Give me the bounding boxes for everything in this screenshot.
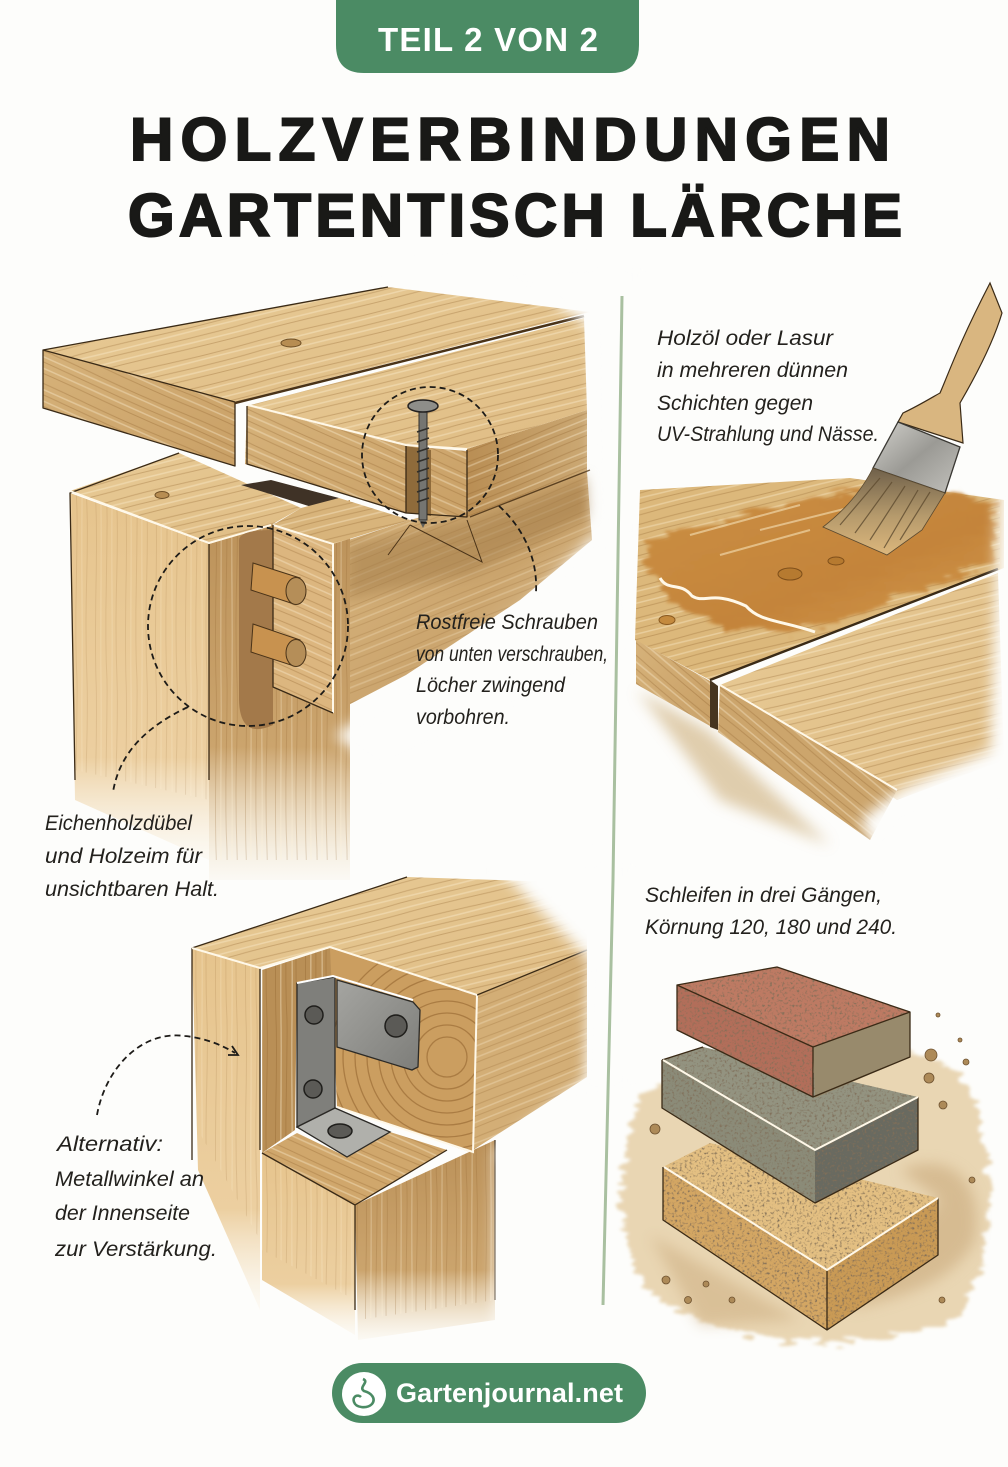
note: dowels: unsichtbaren Halt. (45, 878, 219, 901)
dowel upper (251, 563, 306, 604)
note: screws: Rostfreie Schrauben (416, 611, 598, 634)
note: oil: Holzöl oder Lasur (657, 327, 834, 350)
panel: dowel joint and screws illustration (43, 265, 640, 880)
beam: side of frame (333, 472, 592, 713)
board: right table board with screw slot (245, 318, 587, 517)
note: bracket: der Innenseite (55, 1202, 190, 1225)
note: screws: Löcher zwingend (416, 674, 566, 697)
note: sanding: Schleifen in drei Gängen, (645, 884, 882, 907)
divider between columns (603, 296, 622, 1305)
callout circle: screw (362, 387, 498, 523)
sawdust particles (650, 1013, 975, 1304)
title: HOLZVERBINDUNGEN (130, 106, 890, 173)
leader: dowel note (113, 707, 188, 792)
note: bracket: zur Verstärkung. (54, 1238, 217, 1261)
sawdust patch (623, 1045, 988, 1341)
recess back wall (262, 948, 337, 1153)
leg left face (192, 948, 260, 1310)
badge: part indicator (336, 0, 639, 73)
beam top face (192, 877, 587, 995)
badge: part indicator: TEIL 2 VON 2 (378, 21, 598, 58)
panel: sanding blocks illustration (623, 967, 988, 1341)
leader: screw note (499, 506, 536, 592)
sanding block: medium grey (662, 1047, 918, 1203)
title (128, 106, 902, 249)
beam end and tenon with oak dowels (239, 498, 410, 729)
leg (70, 453, 350, 880)
beam end grain (330, 948, 476, 1152)
board: left table board (43, 287, 590, 466)
note: oil: Schichten gegen (657, 392, 813, 415)
edge feathering panel 2 (860, 470, 1008, 860)
leg lower right (355, 1140, 495, 1340)
note: screws: vorbohren. (416, 706, 510, 729)
leg lower front (262, 1153, 355, 1335)
note: bracket (54, 1133, 217, 1261)
oil stain (645, 492, 995, 632)
note: dowels (45, 812, 219, 901)
note: sanding (645, 884, 897, 939)
footer logo badge: Gartenjournal.net (396, 1378, 623, 1408)
sanding block: fine red (677, 967, 910, 1098)
beam right face (473, 950, 587, 1150)
screw (408, 400, 438, 528)
note: bracket: Alternativ: (55, 1133, 163, 1156)
recess ledge (262, 1132, 447, 1205)
board: front board (710, 569, 1004, 840)
metal angle bracket (297, 976, 420, 1157)
note: oil (657, 327, 879, 446)
bracket screws (304, 1006, 407, 1138)
note: sanding: Körnung 120, 180 und 240. (645, 916, 897, 939)
brush ferrule (873, 422, 960, 493)
sanding block: coarse yellow (663, 1143, 938, 1330)
brush bristles (823, 468, 945, 555)
apron rail (467, 410, 590, 517)
note: dowels: und Holzeim für (45, 845, 203, 868)
panel: metal angle bracket illustration (96, 876, 588, 1339)
edge feathering panel 1 (335, 265, 640, 770)
note: dowels: Eichenholzdübel (45, 812, 193, 835)
note: bracket: Metallwinkel an (55, 1168, 204, 1191)
board: rear board (635, 478, 1004, 845)
edge feathering panel 3 (495, 860, 630, 1350)
shadow cracks under screw (388, 520, 482, 562)
panel: oil application illustration (635, 283, 1008, 860)
note: screws (416, 611, 608, 729)
note: screws: von unten verschrauben, (416, 643, 608, 666)
title: GARTENTISCH LÄRCHE (128, 182, 902, 249)
note: oil: UV-Strahlung und Nässe. (657, 423, 879, 446)
leader arrow: bracket note (97, 1035, 238, 1115)
note: oil: in mehreren dünnen (657, 359, 848, 382)
callout circle: dowels (148, 526, 348, 726)
footer logo badge (332, 1363, 646, 1423)
brush handle (898, 283, 1002, 443)
dowel lower (251, 624, 306, 666)
icon: leaf logo (342, 1372, 386, 1416)
paint brush (823, 283, 1002, 555)
